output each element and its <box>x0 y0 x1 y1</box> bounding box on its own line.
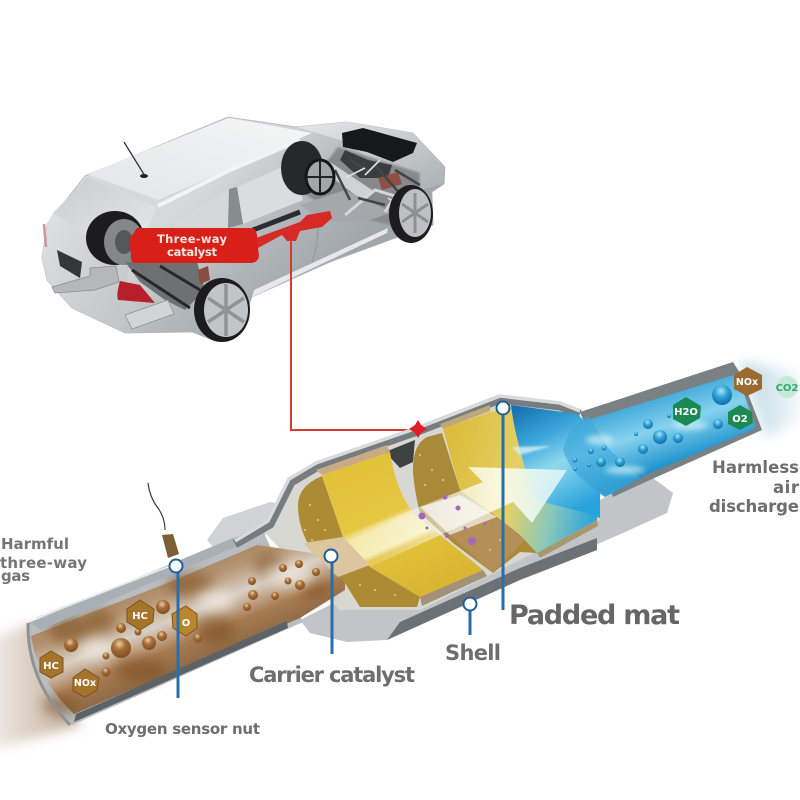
side sill highlight <box>252 228 388 297</box>
label: harmless discharge: Harmless <box>712 458 799 477</box>
hex badge: CO <box>172 606 197 636</box>
engine bay <box>300 128 420 225</box>
number plate <box>57 250 82 278</box>
red junction dot <box>409 420 427 438</box>
muffler <box>52 266 119 293</box>
mounting flange plates <box>207 478 673 642</box>
dark rocker pipes <box>253 212 300 230</box>
door seam <box>312 205 318 262</box>
car roof <box>87 118 312 200</box>
hex badge: NOx <box>73 669 99 697</box>
label: carrier catalyst: Carrier catalyst <box>249 663 415 687</box>
red connector line <box>291 240 418 430</box>
white flow arrow <box>343 467 567 567</box>
rear window <box>53 178 157 235</box>
front wheel <box>389 185 433 243</box>
converter diagram <box>28 362 798 725</box>
label: harmless discharge: air <box>773 478 800 497</box>
inner shell space <box>262 400 600 610</box>
gold face speckles <box>304 454 501 596</box>
hex badge: HC upper <box>127 600 154 630</box>
label: harmful gas: three-way <box>0 554 87 572</box>
label: harmful gas: Harmful <box>1 535 69 553</box>
hex badge: HC: HC <box>43 661 59 672</box>
rear panel <box>42 213 130 333</box>
outlet tube <box>563 362 762 497</box>
antenna <box>124 142 145 176</box>
hex badge: O2 <box>728 405 753 430</box>
exhaust vapour right <box>740 362 800 438</box>
hex badge: NOx outlet: NOx <box>736 377 758 388</box>
hex badge: CO: O <box>182 618 190 629</box>
hex badge: NOx outlet <box>734 367 762 396</box>
red exhaust pipe <box>256 211 332 248</box>
front inner wheel <box>281 141 334 195</box>
rear inner wheel <box>86 211 144 265</box>
hex badge: O2: O2 <box>732 414 748 425</box>
label: padded mat: Padded mat <box>509 600 680 631</box>
label: harmless discharge: discharge <box>709 497 799 516</box>
car illustration <box>42 117 445 342</box>
blue outlet chamber <box>511 405 600 518</box>
blue bubbles <box>572 385 732 471</box>
tail pipe <box>125 300 174 329</box>
car body <box>42 117 445 341</box>
label: harmless discharge <box>709 458 800 516</box>
label: oxygen sensor nut: Oxygen sensor nut <box>105 720 260 738</box>
hex badge: H2O: H2O <box>674 407 698 418</box>
exhaust smoke left <box>0 622 80 750</box>
hex badge: HC <box>40 651 63 678</box>
second catalyst brick <box>413 405 600 573</box>
hex badge: CO2: CO2 <box>776 383 798 394</box>
callout: padded mat pointer <box>496 402 510 610</box>
tail marker <box>44 224 46 247</box>
oxygen sensor <box>148 483 179 558</box>
red tail light <box>117 281 155 303</box>
brown bubbles <box>64 560 320 676</box>
hex badge: HC upper: HC <box>132 611 148 622</box>
label: shell: Shell <box>445 641 501 665</box>
red catalyst label <box>129 228 259 263</box>
hood <box>297 122 445 190</box>
hex badge: H2O <box>673 397 701 426</box>
first catalyst brick <box>298 445 487 607</box>
hex badge: NOx: NOx <box>74 678 96 689</box>
roof rail <box>158 140 300 206</box>
callout: shell pointer <box>464 598 476 635</box>
callout: carrier pointer <box>324 550 338 654</box>
red catalyst label: catalyst <box>167 245 218 259</box>
label: harmful gas <box>0 535 87 585</box>
red catalyst label: Three-way <box>157 232 228 246</box>
chamber highlight <box>512 446 552 455</box>
rear underside mechanicals <box>125 262 210 310</box>
inlet tube <box>28 528 345 725</box>
label: harmful gas: gas <box>1 567 30 585</box>
side windows <box>174 163 303 232</box>
callout: sensor nut pointer <box>170 560 182 698</box>
gap dark region between bricks <box>385 440 415 468</box>
rear wheel <box>194 278 250 342</box>
shell lower rim <box>387 538 597 640</box>
hex badge: CO2 <box>776 376 798 398</box>
shell top rim <box>235 396 580 544</box>
purple particles <box>418 494 486 545</box>
